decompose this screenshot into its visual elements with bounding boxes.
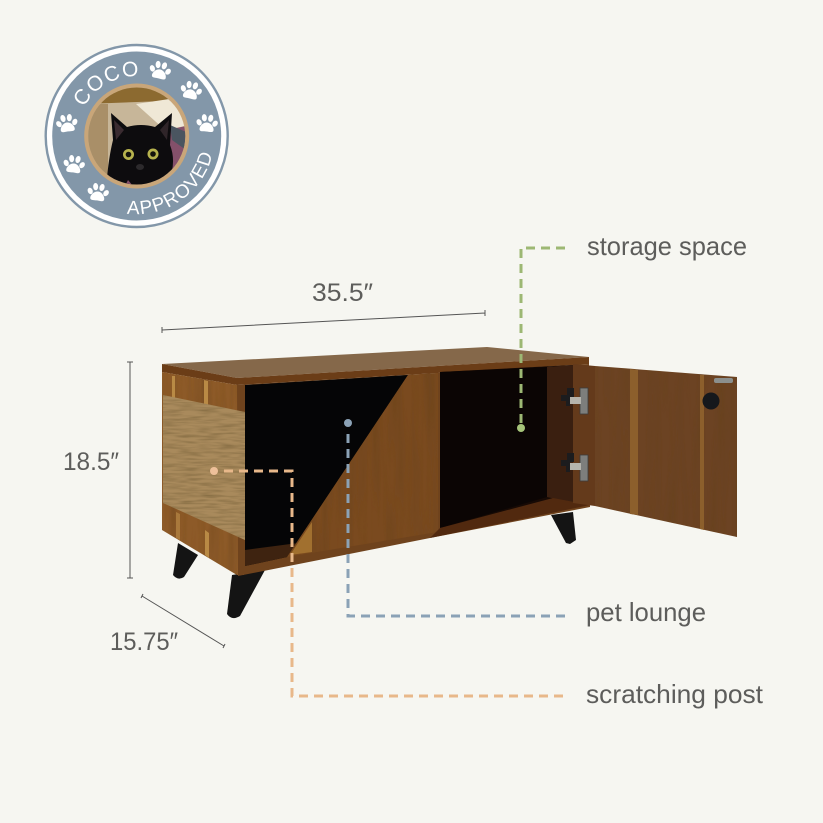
storage inner wall xyxy=(547,365,573,503)
dimension label: height: 18.5″ xyxy=(63,448,119,476)
badge heading: APPROVED: APPROVED xyxy=(126,152,211,214)
callout: scratching post: scratching post xyxy=(586,679,764,709)
badge: Coco approved xyxy=(44,44,229,228)
callout: storage space: storage space xyxy=(587,231,747,261)
dimension line: depth xyxy=(141,594,225,648)
cabinet xyxy=(162,347,737,618)
side panel xyxy=(162,372,244,575)
badge paw icons xyxy=(54,59,220,202)
front frame xyxy=(237,364,590,576)
storage back panel xyxy=(440,367,547,528)
rope wrap xyxy=(163,395,245,540)
front-left leg xyxy=(227,570,265,618)
dimension line: width xyxy=(162,310,485,333)
door latch plate xyxy=(714,378,733,383)
lower hinge xyxy=(561,453,588,481)
dimension line: height xyxy=(127,362,133,578)
right leg xyxy=(551,512,576,544)
back-left leg xyxy=(173,543,198,579)
top surface xyxy=(162,347,589,378)
storage opening xyxy=(440,365,573,528)
callout: pet lounge xyxy=(344,419,706,627)
dimension label: width: 35.5″ xyxy=(312,279,373,307)
storage floor xyxy=(430,498,590,538)
triangular door xyxy=(287,373,438,557)
pet lounge floor xyxy=(245,543,298,566)
callout: scratching post xyxy=(210,467,764,709)
door magnet hole xyxy=(702,392,720,410)
dimension label: depth: 15.75″ xyxy=(110,628,178,656)
open door xyxy=(595,366,737,537)
badge heading: COCO: COCO xyxy=(74,62,138,104)
upper hinge xyxy=(561,388,588,414)
top edge strip xyxy=(162,357,589,385)
door edge xyxy=(573,364,595,506)
callout: pet lounge: pet lounge xyxy=(586,597,706,627)
callout: storage space xyxy=(517,231,747,432)
badge photo: black cat in round opening xyxy=(84,84,190,192)
pet lounge opening xyxy=(245,375,408,566)
